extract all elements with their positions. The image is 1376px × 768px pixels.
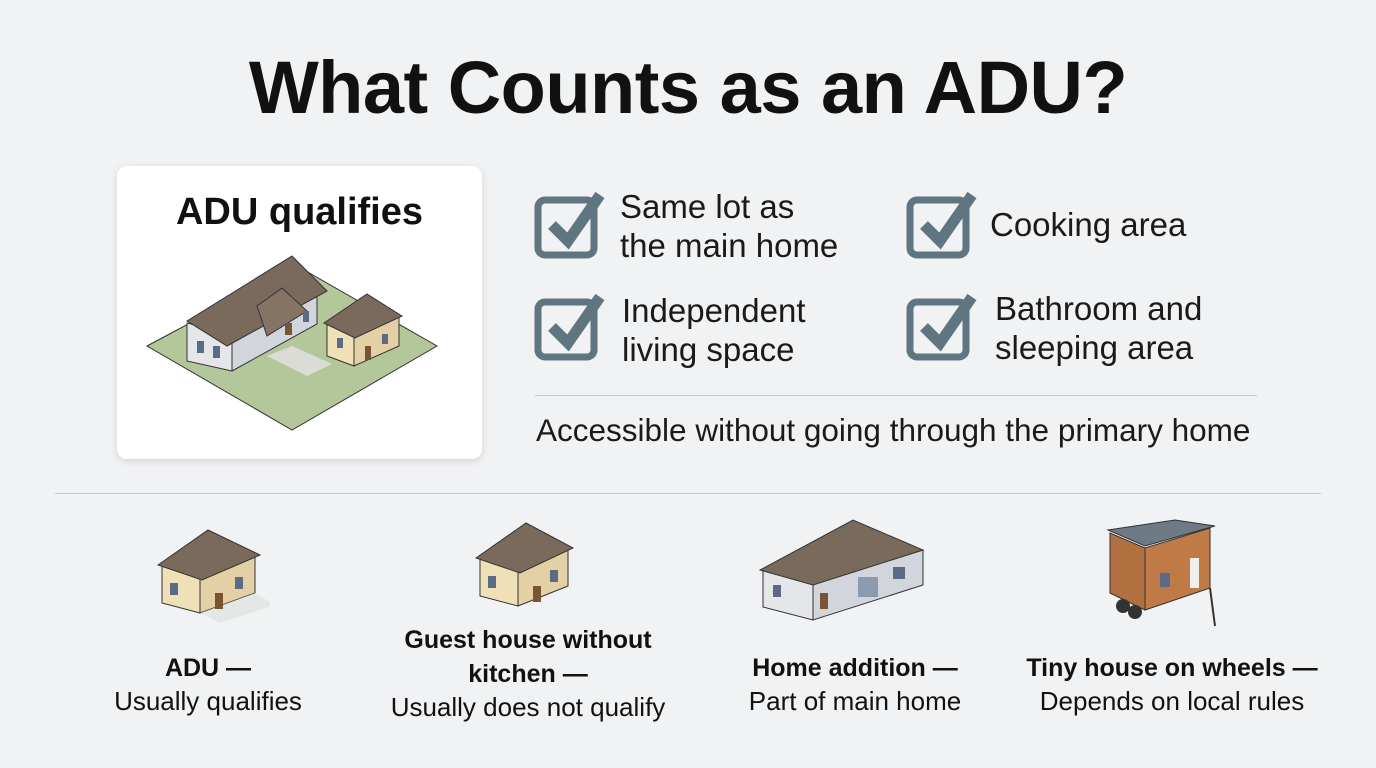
item: same lot: Same lot as (620, 188, 794, 225)
card heading: ADU qualifies (176, 191, 423, 233)
icon: checkbox (534, 192, 604, 258)
label: guest house (391, 626, 666, 722)
item: same lot: the main home (620, 227, 838, 264)
icon: home addition (758, 520, 924, 621)
panel: ADU qualifies card (117, 166, 482, 459)
item: cooking area: Cooking area (990, 206, 1186, 243)
note: accessibility: Accessible without going through the primary home (536, 412, 1250, 448)
illustration: main home and ADU on lot (146, 255, 438, 431)
label: ADU: ADU — (165, 654, 251, 682)
item: bathroom sleeping: sleeping area (995, 329, 1193, 366)
label: home addition: Part of main home (749, 686, 961, 716)
item: bathroom sleeping (906, 290, 1202, 366)
item: independent living: living space (622, 331, 794, 368)
label: guest house: Usually does not qualify (391, 692, 665, 722)
label: tiny house: Depends on local rules (1040, 686, 1304, 716)
item: same lot (534, 188, 838, 264)
label: ADU: Usually qualifies (114, 686, 302, 716)
label: tiny house: Tiny house on wheels — (1026, 654, 1318, 682)
item: independent living (534, 292, 806, 368)
label: tiny house (1026, 654, 1318, 716)
label: home addition (749, 654, 961, 716)
item: cooking area (906, 192, 1186, 258)
icon: guest house (475, 522, 574, 607)
title: What Counts as an ADU? (249, 46, 1127, 129)
icon: tiny house on wheels (1106, 520, 1216, 626)
label: guest house: Guest house without (404, 626, 652, 654)
label: home addition: Home addition — (752, 654, 958, 682)
item: independent living: Independent (622, 292, 806, 329)
checklist (534, 188, 1202, 368)
item: bathroom sleeping: Bathroom and (995, 290, 1202, 327)
icon: ADU house (157, 529, 270, 623)
label: ADU (114, 654, 302, 716)
label: guest house: kitchen — (468, 660, 588, 688)
